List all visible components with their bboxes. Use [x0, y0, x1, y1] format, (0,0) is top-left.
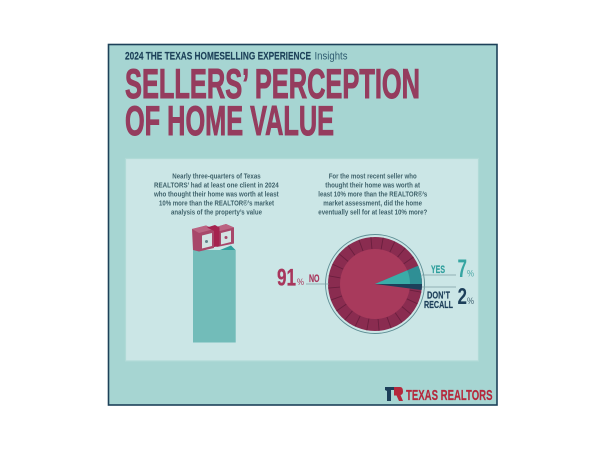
- text block: left statement: who thought their home was worth at least: [153, 189, 279, 198]
- text block: right question: thought their home was worth at: [325, 180, 420, 189]
- text block: left statement: 10% more than the REALTOR®’s market: [159, 198, 274, 207]
- text block: right question: For the most recent seller who: [329, 171, 417, 180]
- label: 7% yes: [422, 255, 474, 283]
- background frame: [108, 44, 497, 405]
- label: 2% don't recall: %: [467, 296, 474, 306]
- text block: left statement: Nearly three-quarters of Texas: [172, 171, 261, 180]
- label: 2% don't recall: [422, 283, 474, 311]
- label: 91% no: [277, 264, 329, 292]
- label: 7% yes: 7: [458, 255, 467, 283]
- text block: left statement: [153, 171, 279, 216]
- pie slice: don't recall 2%: [375, 284, 422, 290]
- pie chart: [326, 234, 424, 334]
- pie slice: yes 7%: [375, 266, 422, 284]
- label: 2% don't recall: RECALL: [424, 299, 453, 311]
- text block: left statement: REALTORS’ had at least one client in 2024: [154, 180, 279, 189]
- ring ticks: [328, 237, 421, 331]
- text block: right question: [318, 171, 428, 216]
- title: [125, 60, 420, 144]
- logo: Texas Realtors: TEXAS REALTORS: [406, 387, 492, 404]
- text block: left statement: analysis of the property’s value: [171, 207, 262, 216]
- text block: right question: least 10% more than the REALTOR®’s: [318, 189, 427, 198]
- header line: 2024 THE TEXAS HOMESELLING EXPERIENCE: [125, 50, 311, 62]
- label: 7% yes: YES: [431, 264, 445, 276]
- text block: right question: market assessment, did the home: [323, 198, 422, 207]
- bar chart column: [193, 246, 236, 342]
- icon: money bundles: [192, 224, 234, 252]
- label: 91% no: NO: [309, 273, 320, 285]
- label: 91% no: %: [297, 277, 304, 287]
- label: 7% yes: %: [467, 268, 474, 278]
- logo: Texas Realtors: [385, 387, 492, 404]
- title: SELLERS’ PERCEPTION: [125, 60, 420, 107]
- label: 2% don't recall: DON’T: [427, 290, 450, 302]
- header line: Insights: [314, 50, 348, 62]
- label: 2% don't recall: 2: [458, 283, 467, 309]
- label: 91% no: 91: [277, 264, 296, 292]
- text block: right question: eventually sell for at least 10% more?: [318, 207, 428, 216]
- title: OF HOME VALUE: [125, 97, 334, 144]
- panel: [126, 158, 478, 361]
